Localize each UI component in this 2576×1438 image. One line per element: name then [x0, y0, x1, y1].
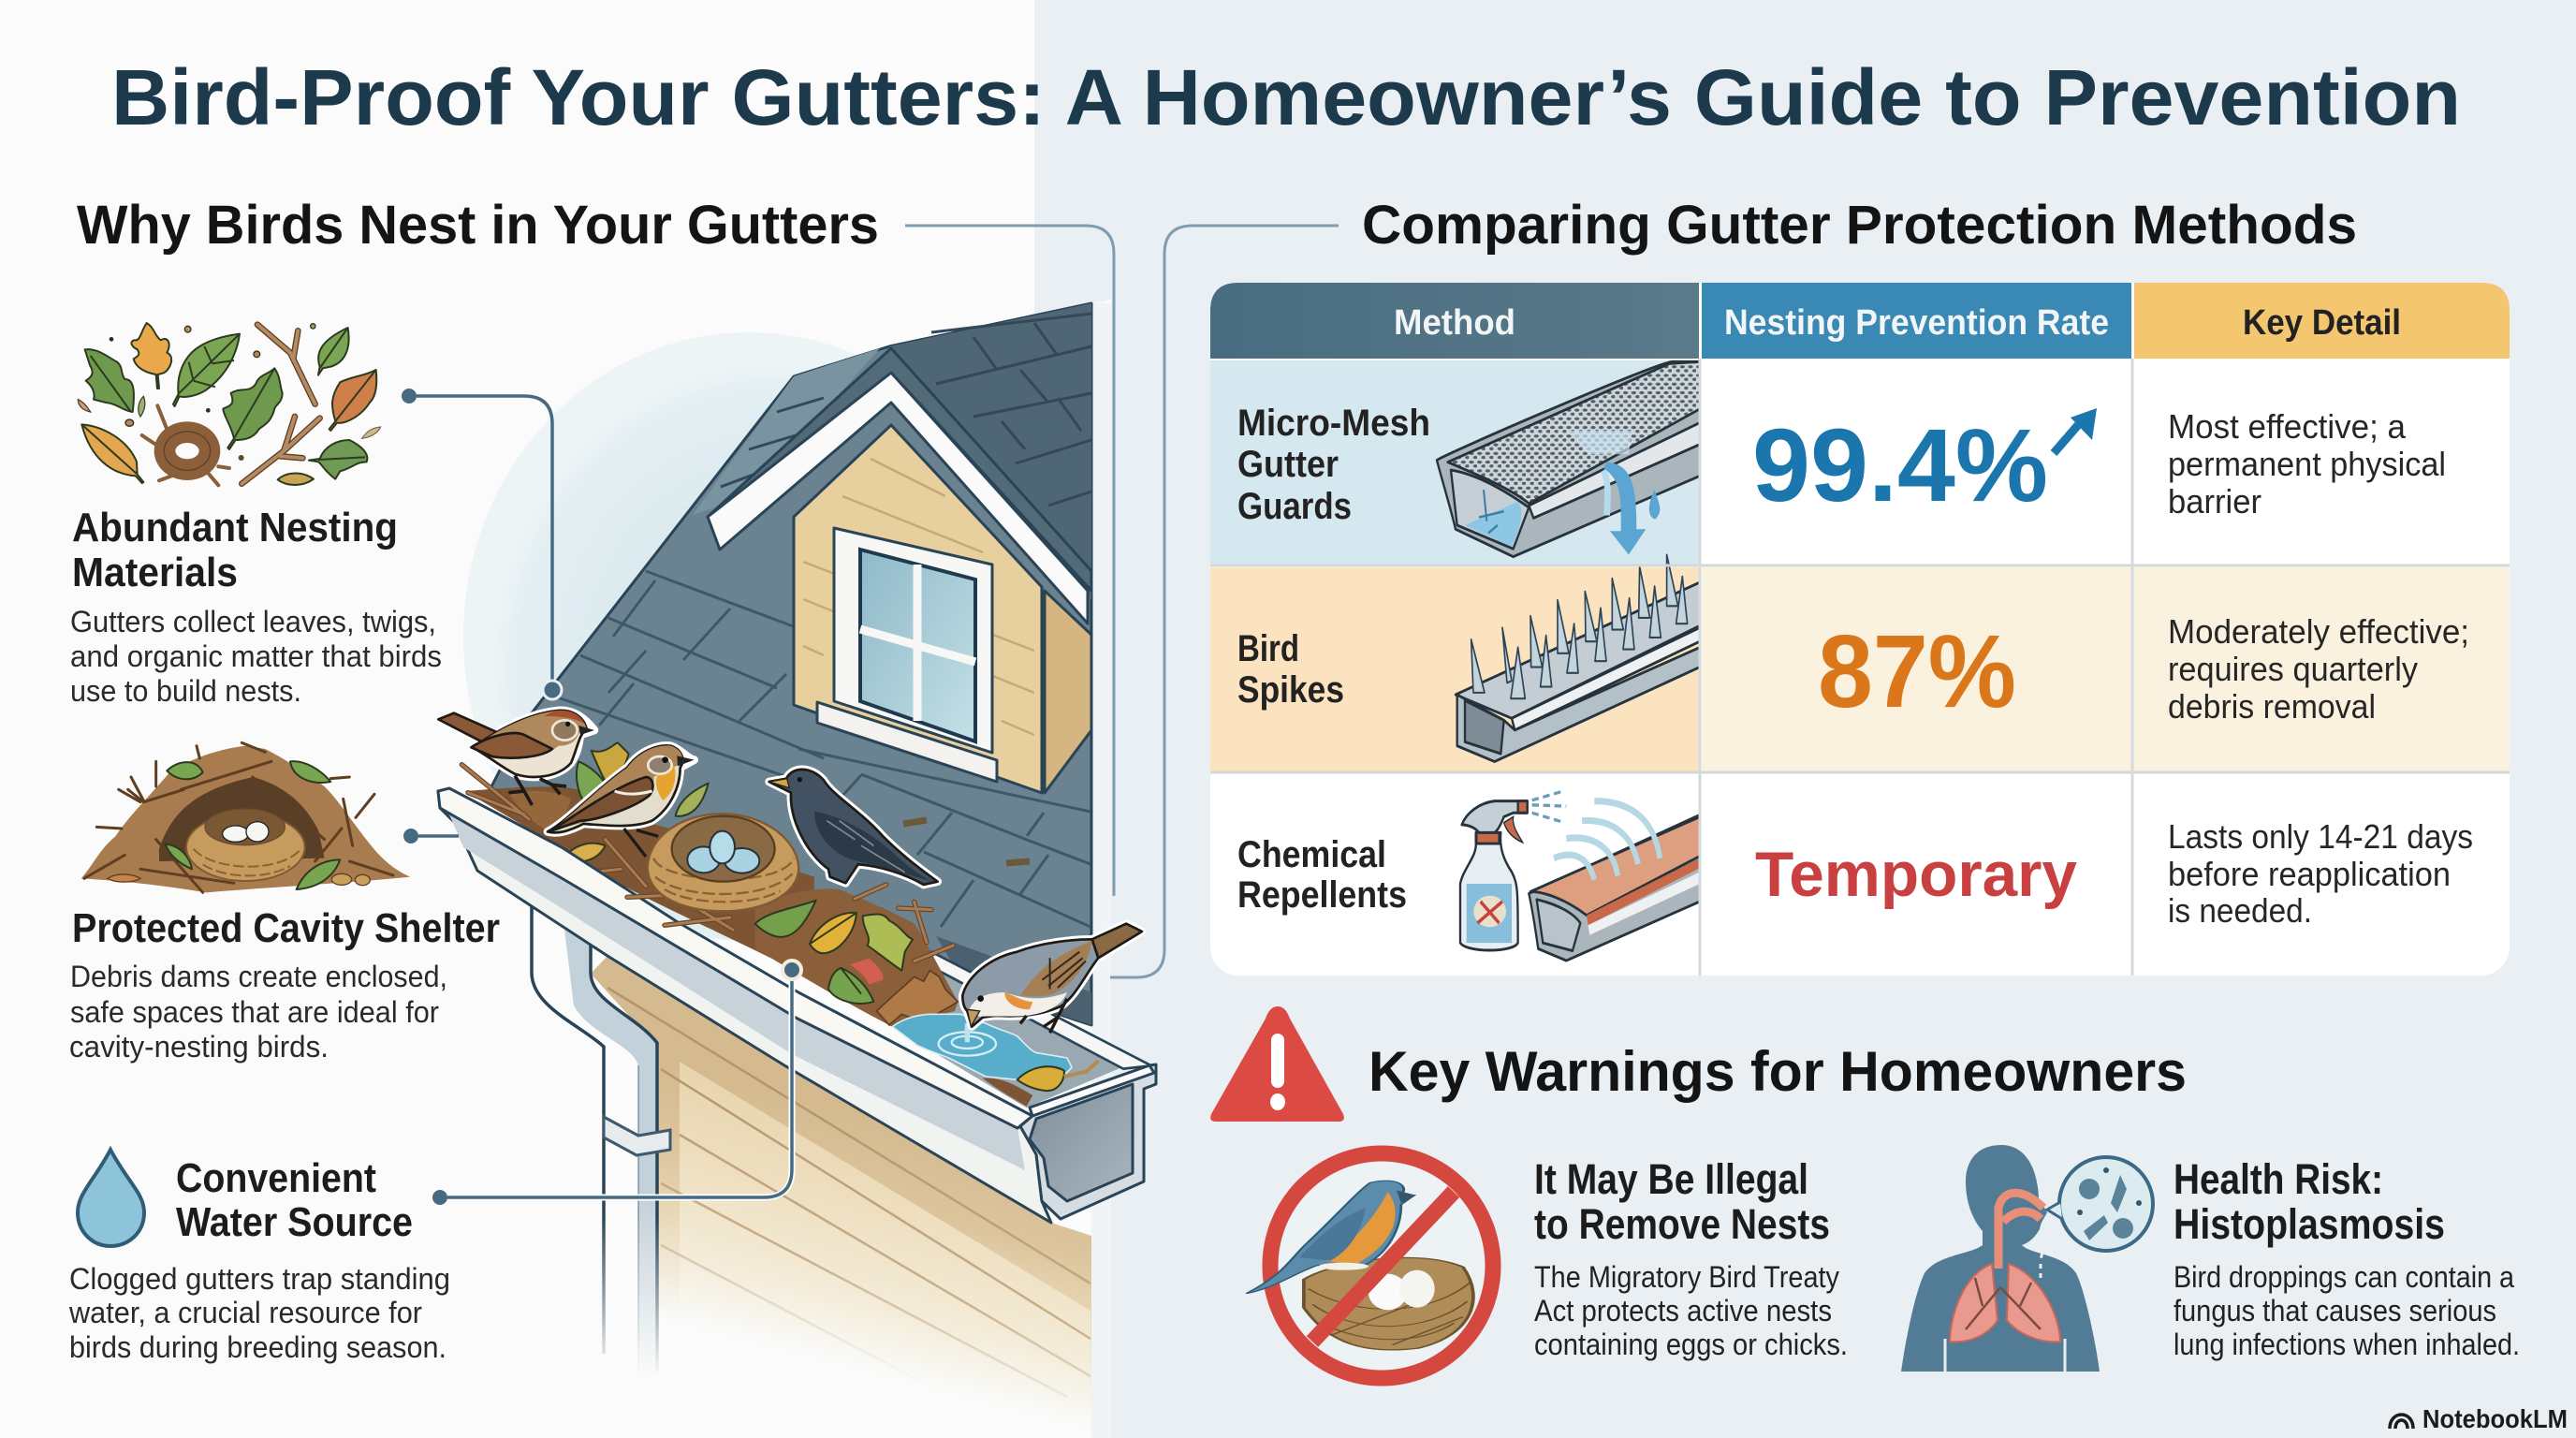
water pool [892, 1014, 1098, 1107]
bird: blackbird [769, 770, 938, 885]
gutter end cap [1020, 1064, 1156, 1219]
text: key detail: debris removal [2168, 687, 2376, 726]
icon: micro-mesh gutter guard [1437, 361, 1700, 557]
row: chemical repellents: Chemical [1237, 834, 1386, 875]
bird: drinking bird [962, 924, 1142, 1033]
siding wall [591, 956, 1091, 1427]
text: convenient water source [68, 1155, 450, 1364]
icon: debris cavity with nest [81, 742, 410, 892]
text: health risk: Health Risk: [2174, 1155, 2383, 1203]
header row: Key Detail [2243, 303, 2401, 343]
bird: sparrow [438, 711, 594, 805]
text: convenient water source: birds during breeding season. [69, 1330, 446, 1364]
text: convenient water source: Convenient [176, 1155, 376, 1201]
lungs [1950, 1264, 1998, 1342]
text: health risk: lung infections when inhaled. [2174, 1328, 2520, 1361]
text: key detail: requires quarterly [2168, 650, 2418, 688]
text: abundant nesting materials: Materials [72, 550, 238, 595]
connector: water source [432, 961, 801, 1205]
text: health risk: fungus that causes serious [2174, 1294, 2496, 1328]
text: health risk [2174, 1155, 2520, 1361]
icon: no nest removal [1246, 1153, 1493, 1378]
text: key detail [2168, 407, 2446, 521]
text: abundant nesting materials: use to build nests. [70, 674, 301, 708]
text: abundant nesting materials: and organic matter that birds [70, 639, 442, 673]
connector: cavity shelter [403, 829, 459, 844]
text: key detail: permanent physical [2168, 445, 2446, 483]
spore bubble [2059, 1157, 2153, 1251]
header row: Method [1394, 303, 1515, 343]
row: micro-mesh: Guards [1237, 486, 1352, 527]
text: protected cavity shelter: cavity-nesting birds. [69, 1030, 329, 1064]
row: chemical repellents [1237, 791, 2473, 961]
text: illegal to remove nests: It May Be Illegal [1534, 1155, 1808, 1203]
text: key detail [2168, 612, 2469, 726]
text: key detail: before reapplication [2168, 855, 2451, 893]
text: key detail: is needed. [2168, 891, 2312, 930]
background: right panel [1034, 0, 2576, 1438]
icon: human lungs and spores [1901, 1145, 2153, 1372]
window [817, 528, 997, 782]
icon: down arrow [1603, 462, 1646, 555]
text: abundant nesting materials: Gutters collect leaves, twigs, [70, 605, 436, 638]
downspout [532, 889, 657, 1372]
table card [1210, 283, 2510, 976]
row: bird spikes: Bird [1237, 628, 1299, 669]
row: chemical repellents: Repellents [1237, 874, 1407, 916]
text: protected cavity shelter: safe spaces that are ideal for [70, 995, 439, 1029]
heading: why birds nest: Why Birds Nest in Your Gutters [77, 195, 879, 256]
background: left panel [0, 0, 1111, 1438]
row: micro-mesh: Gutter [1237, 444, 1339, 485]
nest with blue eggs [627, 814, 798, 930]
text: key detail: Most effective; a [2168, 407, 2407, 446]
text: illegal to remove nests: containing eggs or chicks. [1534, 1328, 1848, 1361]
text: illegal to remove nests [1534, 1155, 1848, 1361]
icon: up arrow [2054, 425, 2078, 453]
text: key detail [2168, 817, 2473, 930]
bird and nest [1246, 1181, 1473, 1350]
row: micro-mesh: Micro-Mesh [1237, 403, 1430, 444]
downspout bracket [604, 1117, 670, 1155]
row: micro-mesh [1210, 360, 2446, 565]
heading: comparing methods: Comparing Gutter Protection Methods [1362, 195, 2357, 256]
debris in gutter: right section [755, 885, 1098, 1107]
text: health risk: Bird droppings can contain a [2174, 1260, 2514, 1294]
inhaled spores [2041, 1226, 2050, 1278]
text: temporary: Temporary [1755, 839, 2077, 910]
header row [1210, 283, 2510, 359]
text: convenient water source: water, a crucial resource for [68, 1296, 422, 1329]
text: key detail: Lasts only 14-21 days [2168, 817, 2473, 856]
comparison table [1210, 283, 2510, 976]
text: illegal to remove nests: The Migratory Bird Treaty [1534, 1260, 1839, 1294]
connector: nesting materials [402, 389, 562, 699]
text: abundant nesting materials [70, 505, 442, 708]
header row: Nesting Prevention Rate [1724, 303, 2109, 343]
text: convenient water source: Water Source [176, 1199, 413, 1245]
bird: robin [548, 745, 695, 857]
row: bird spikes [1210, 555, 2510, 772]
dormer [708, 348, 1091, 793]
icon: spray bottle [1460, 791, 1566, 950]
heading: key warnings: Key Warnings for Homeowners [1368, 1040, 2187, 1103]
text: health risk: Histoplasmosis [2174, 1200, 2445, 1248]
icon: bird spikes [1456, 555, 1700, 762]
text: illegal to remove nests: Act protects active nests [1534, 1294, 1832, 1328]
gutter rim [438, 788, 1032, 1128]
icon: leaves and twigs [78, 323, 381, 485]
text: 99.4%: 99.4% [1752, 408, 2048, 523]
row: bird spikes: Spikes [1237, 669, 1344, 711]
text: convenient water source: Clogged gutters trap standing [69, 1262, 450, 1296]
gutter front face [438, 788, 1051, 1223]
text: 87%: 87% [1818, 614, 2016, 729]
title: Bird-Proof Your Gutters: A Homeowner’s Guide to Prevention [111, 53, 2461, 141]
text: protected cavity shelter: Debris dams create enclosed, [70, 960, 447, 993]
icon: treated gutter [1529, 801, 1700, 961]
text: protected cavity shelter [69, 905, 500, 1064]
sky halo [463, 332, 1034, 941]
icon: warning triangle [1210, 1006, 1344, 1122]
airway [1998, 1193, 2043, 1269]
connector: left heading to roof [905, 226, 1114, 896]
connector: comparison heading to gutter [1110, 226, 1339, 977]
prohibition bar [1312, 1192, 1454, 1342]
house illustration [438, 303, 1156, 1427]
text: illegal to remove nests: to Remove Nests [1534, 1200, 1830, 1248]
text: abundant nesting materials: Abundant Nesting [72, 505, 398, 550]
background: margin strip beside house [1091, 303, 1111, 1438]
debris in gutter: left section [461, 742, 814, 958]
text: key detail: Moderately effective; [2168, 612, 2469, 651]
gutter back and interior [886, 952, 1151, 1108]
text: protected cavity shelter: Protected Cavity Shelter [72, 905, 500, 951]
text: key detail: barrier [2168, 482, 2261, 521]
icon: water drop [78, 1150, 144, 1246]
roof [487, 303, 1091, 1025]
